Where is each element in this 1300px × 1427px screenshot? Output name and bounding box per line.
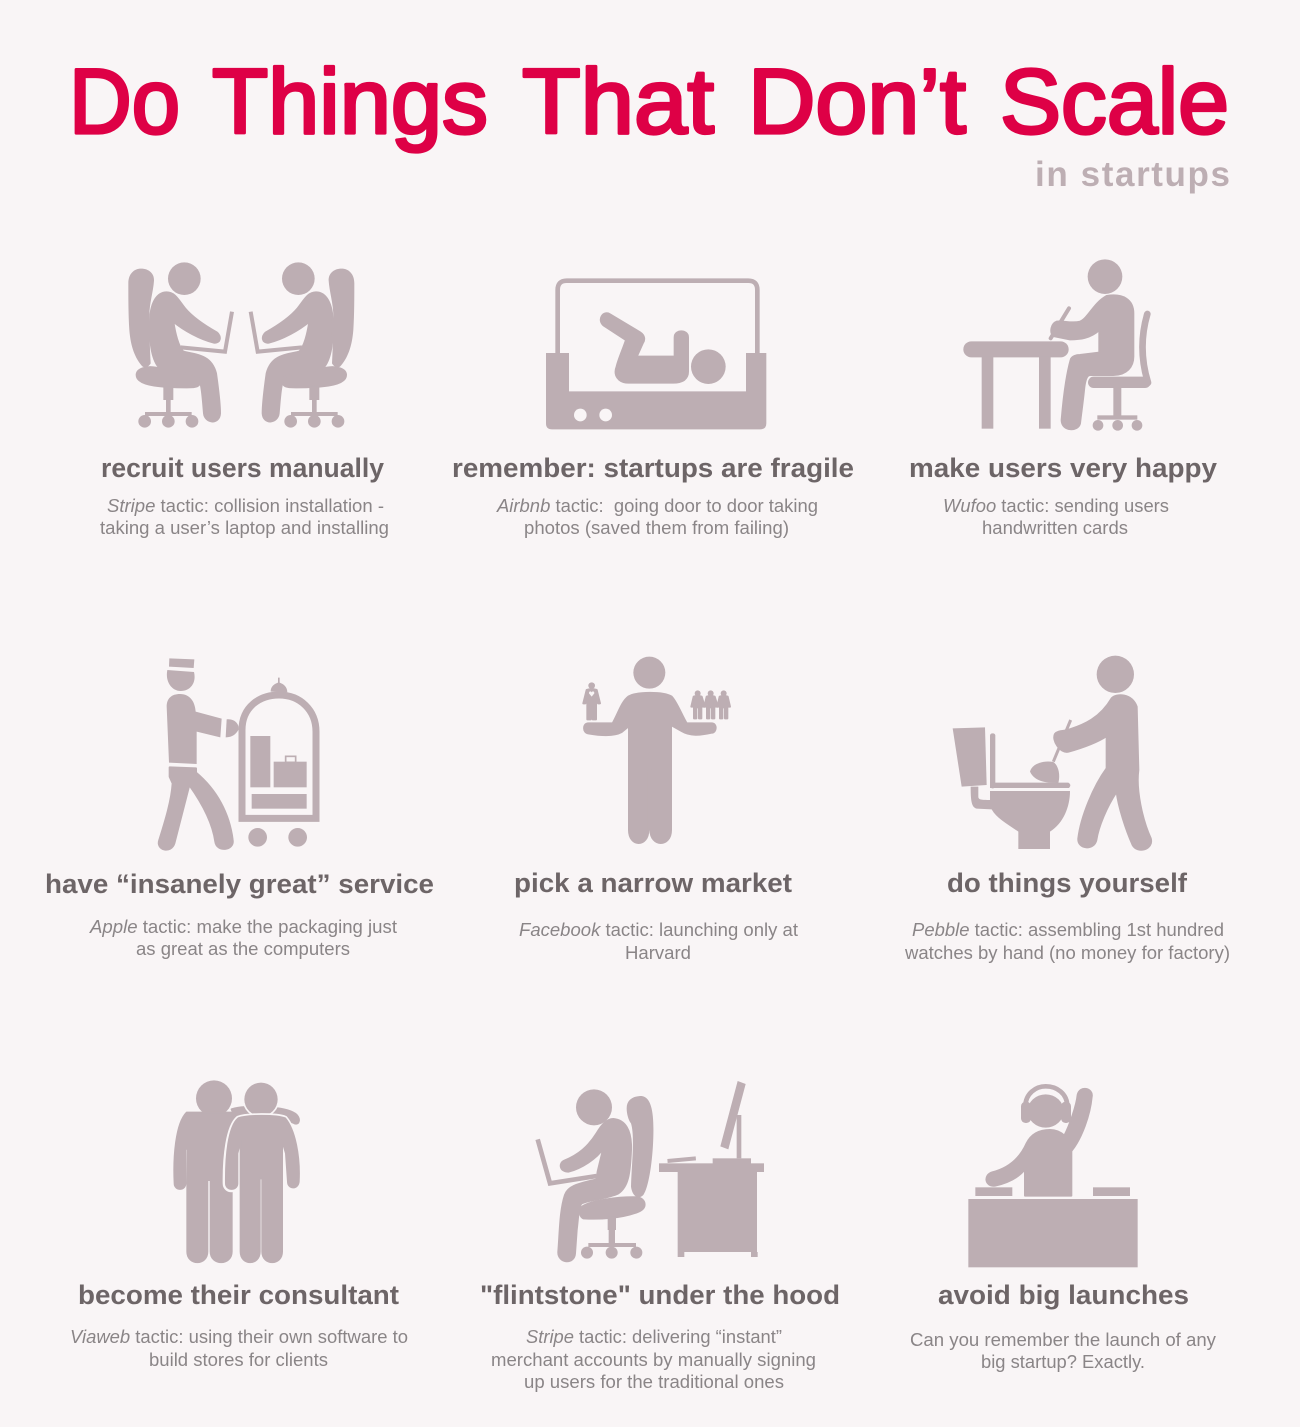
panel: do things yourself <box>904 656 1230 963</box>
tactic text: Wufoo tactic: sending users <box>943 495 1169 516</box>
tactic text <box>943 495 1169 538</box>
heading: remember: startups are fragile <box>452 453 854 483</box>
tactic text <box>70 1326 408 1370</box>
heading: do things yourself <box>947 868 1188 898</box>
panel: become their consultant <box>70 1080 408 1370</box>
tactic text <box>496 495 818 538</box>
title: Scale <box>1000 51 1229 153</box>
tactic text: Pebble tactic: assembling 1st hundred <box>912 919 1224 940</box>
heading: pick a narrow market <box>514 868 792 898</box>
panel: have insanely great service <box>45 658 434 959</box>
body text: big startup? Exactly. <box>981 1351 1145 1372</box>
tactic text: watches by hand (no money for factory) <box>904 942 1230 963</box>
panel: pick a narrow market <box>514 657 798 963</box>
tactic text: as great as the computers <box>136 938 350 959</box>
tactic text <box>100 495 389 538</box>
title: Things <box>212 51 488 153</box>
heading: recruit users manually <box>101 453 384 483</box>
title: That <box>522 51 714 153</box>
panel: remember startups are fragile <box>452 281 854 538</box>
title: Do <box>69 51 180 153</box>
icon: person weighing small groups <box>583 657 730 843</box>
panel: recruit users manually <box>100 262 389 538</box>
title: Don’t <box>748 51 966 153</box>
tactic text: Facebook tactic: launching only at <box>519 919 798 940</box>
heading: become their consultant <box>78 1280 399 1310</box>
heading: make users very happy <box>909 453 1217 483</box>
tactic text: Viaweb tactic: using their own software to <box>70 1326 408 1347</box>
heading: avoid big launches <box>938 1280 1189 1310</box>
icon: bellhop with luggage cart <box>159 658 316 850</box>
tactic text <box>89 916 397 959</box>
tactic text: Stripe tactic: collision installation - <box>107 495 384 516</box>
icon: person writing at desk <box>963 259 1151 431</box>
icon: DJ at decks <box>968 1086 1138 1267</box>
tactic text <box>904 919 1230 963</box>
tactic text: Harvard <box>625 942 691 963</box>
tactic text <box>491 1326 816 1392</box>
icon: person at laptop beside desk <box>538 1081 764 1261</box>
body text: Can you remember the launch of any <box>910 1329 1217 1350</box>
tactic text: photos (saved them from failing) <box>524 517 789 538</box>
body text <box>910 1329 1217 1372</box>
tactic text: build stores for clients <box>149 1349 328 1370</box>
title <box>69 51 1229 153</box>
tactic text: handwritten cards <box>982 517 1128 538</box>
icon: two people side by side <box>174 1080 299 1263</box>
tactic text: merchant accounts by manually signing <box>491 1349 816 1370</box>
panel: flintstone under the hood <box>480 1081 840 1392</box>
tactic text: Apple tactic: make the packaging just <box>89 916 397 937</box>
heading: "flintstone" under the hood <box>480 1280 840 1310</box>
heading: have “insanely great” service <box>45 869 434 899</box>
subtitle: in startups <box>1035 155 1230 194</box>
panel: avoid big launches <box>910 1086 1217 1372</box>
tactic text: taking a user’s laptop and installing <box>100 517 389 538</box>
icon: baby in incubator <box>546 281 766 429</box>
tactic text: up users for the traditional ones <box>524 1371 784 1392</box>
panel: make users very happy <box>909 259 1217 538</box>
tactic text: Airbnb tactic: going door to door taking <box>496 495 818 516</box>
icon: person plunging toilet <box>953 656 1151 850</box>
tactic text <box>519 919 798 963</box>
icon: two people with laptops <box>128 262 354 428</box>
tactic text: Stripe tactic: delivering “instant” <box>526 1326 782 1347</box>
